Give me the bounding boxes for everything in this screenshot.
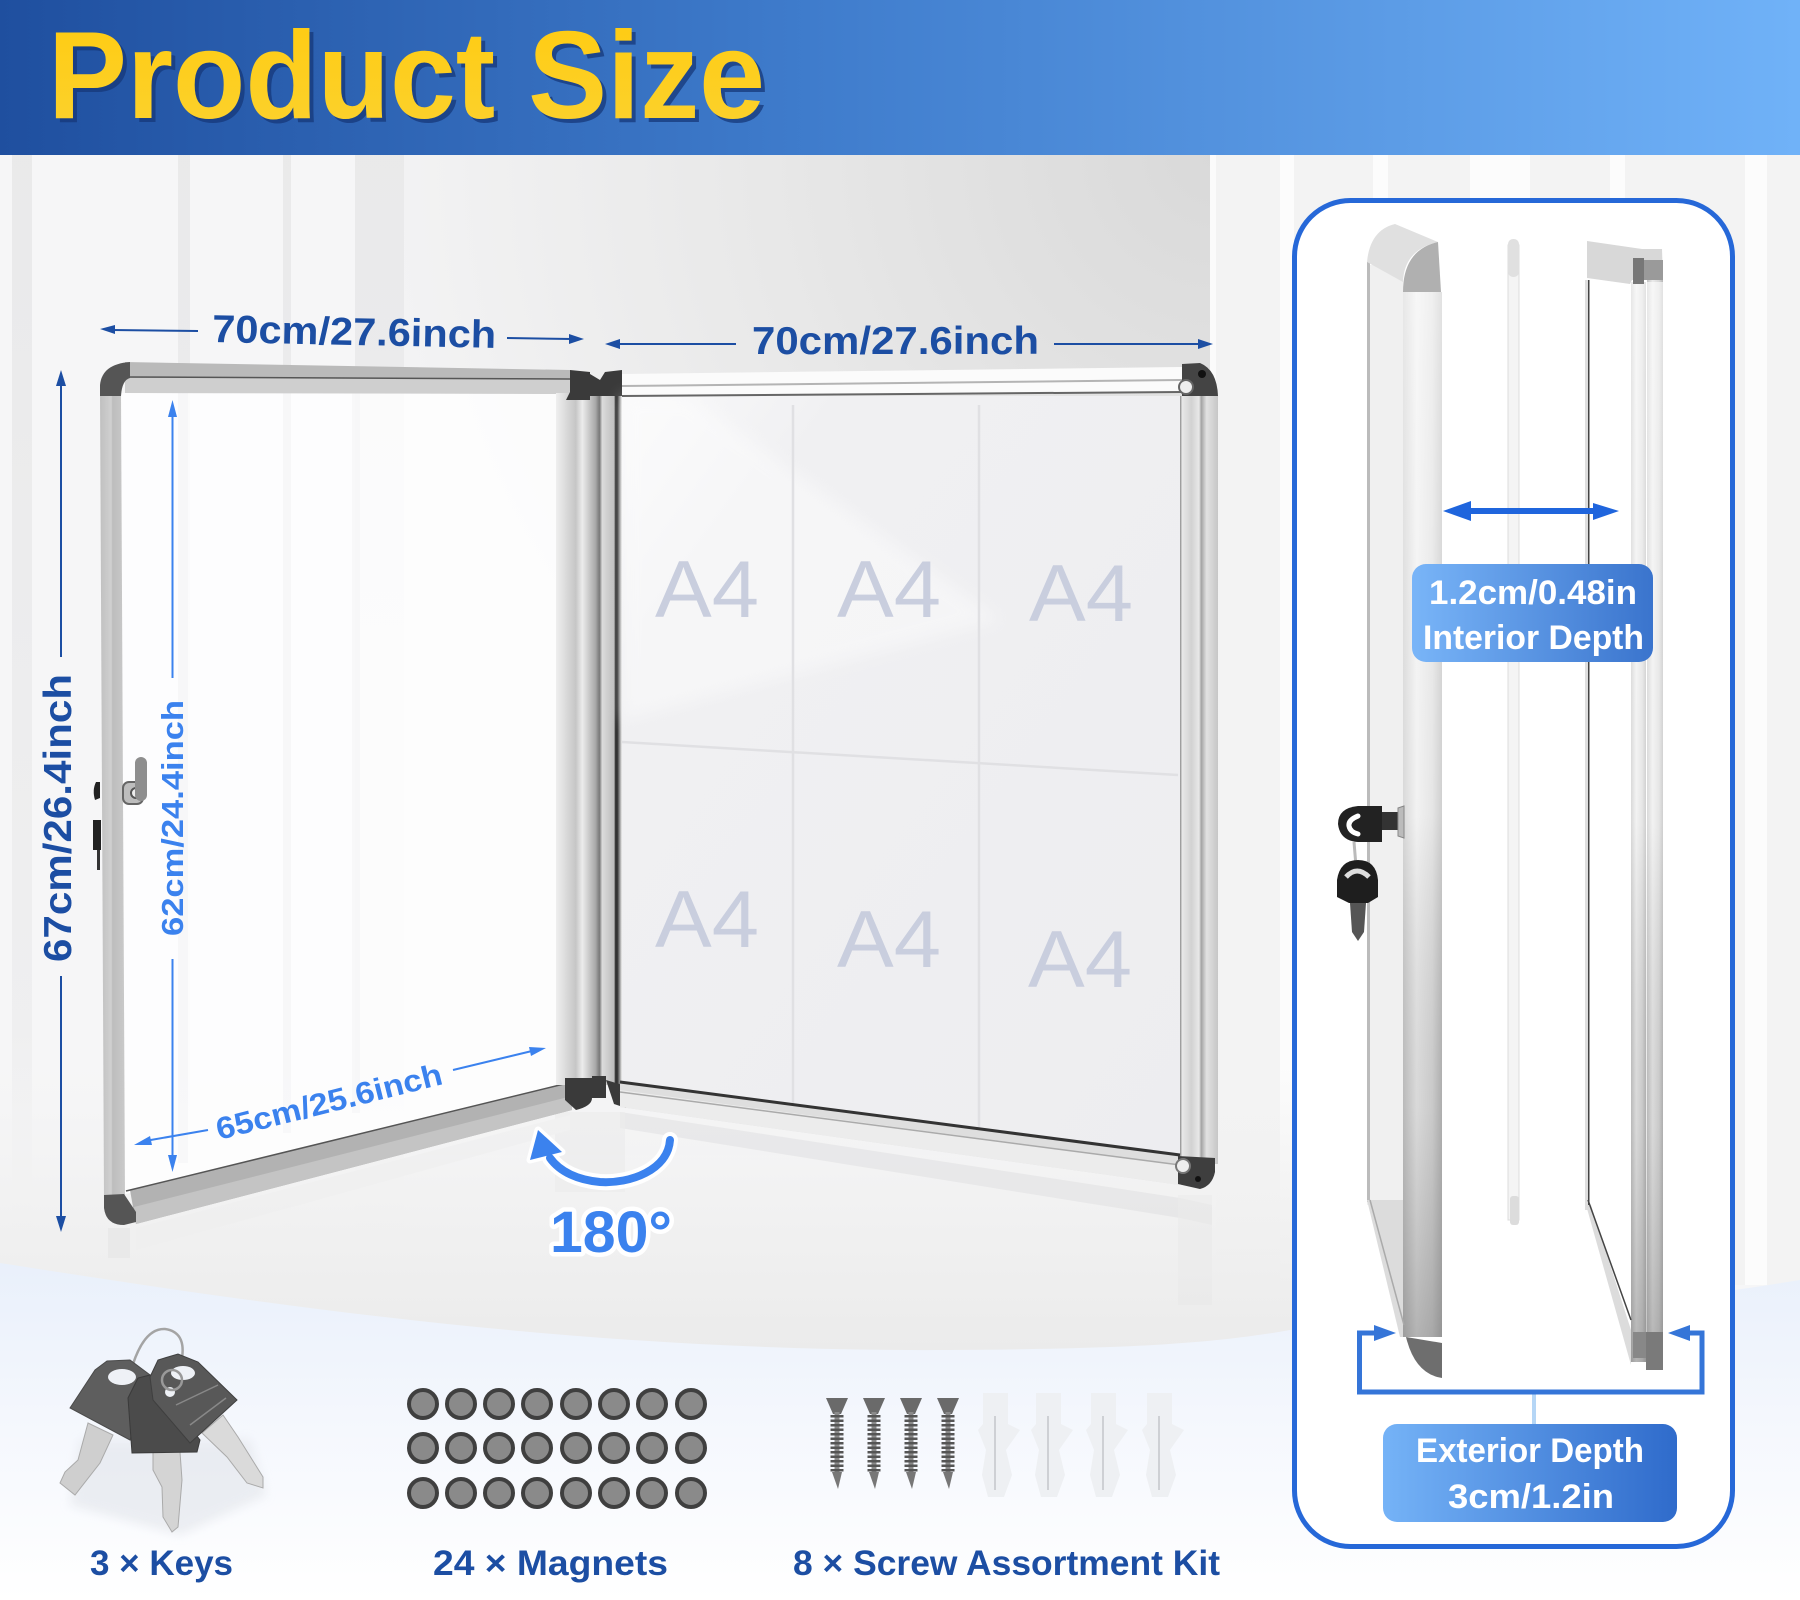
- A4 labels: A4: [837, 545, 941, 635]
- dimension: interior width 65cm/25.6inch: 65cm/25.6inch: [212, 1057, 446, 1147]
- title: Product Size: Product Size: [48, 7, 765, 145]
- left door: frame: [100, 362, 572, 1224]
- right profile: [1585, 241, 1663, 1370]
- centre glass rod: [1508, 239, 1519, 1225]
- A4 labels: A4: [837, 895, 941, 985]
- A4 labels: A4: [655, 545, 759, 635]
- badge: interior depth: Interior Depth: [1423, 619, 1644, 657]
- lock and key: [1337, 806, 1404, 941]
- label: 3 × Keys: 3 × Keys: [90, 1544, 233, 1583]
- badge: exterior depth: Exterior Depth: [1416, 1432, 1644, 1470]
- left profile: [1367, 224, 1442, 1378]
- right door: glass pane with A4 sheets: [622, 396, 1180, 1156]
- title: Product Size: Product Size: [52, 11, 769, 149]
- dimension: interior height 62cm/24.4inch: [155, 400, 190, 1172]
- left door: corner caps: [100, 362, 136, 1225]
- right door: corner caps: [1176, 363, 1218, 1189]
- right door: frame: [620, 367, 1218, 1185]
- icon: 180 degree rotation arrow: [530, 1130, 670, 1182]
- label: 8 × Screw Assortment Kit: 8 × Screw Assortment Kit: [793, 1544, 1220, 1583]
- icon: wall anchors: [978, 1393, 1184, 1497]
- A4 labels: [655, 545, 1133, 1005]
- lock on left door: [93, 757, 147, 870]
- icon: keys: [60, 1329, 266, 1535]
- dimension: top right 70cm/27.6inch: 70cm/27.6inch: [752, 320, 1039, 363]
- dimension: top left 70cm/27.6inch: 70cm/27.6inch: [212, 308, 497, 357]
- dimension: top right 70cm/27.6inch: [605, 320, 1213, 363]
- open display board: [93, 362, 1218, 1225]
- A4 labels: A4: [1028, 915, 1132, 1005]
- label: 24 × Magnets: 24 × Magnets: [433, 1544, 668, 1583]
- dimension: top left 70cm/27.6inch: [100, 308, 584, 357]
- left door: glass pane: [121, 393, 556, 1195]
- dimension: interior width 65cm/25.6inch: [134, 1047, 546, 1147]
- hinge caps: [565, 370, 626, 1110]
- dimension: interior height 62cm/24.4inch: 62cm/24.4inch: [155, 700, 190, 936]
- floor reflection of the board: [108, 1112, 1212, 1305]
- dimension: height 67cm/26.4inch: 67cm/26.4inch: [37, 674, 80, 962]
- panel: depth side view: [1294, 200, 1732, 1546]
- icon: 24 magnets: [409, 1390, 705, 1507]
- A4 labels: A4: [1029, 549, 1133, 639]
- dimension: height 67cm/26.4inch: [37, 370, 80, 1232]
- badge: exterior depth: 3cm/1.2in: [1448, 1478, 1614, 1516]
- bracket: exterior depth: [1360, 1325, 1702, 1424]
- hinge column: [556, 393, 622, 1085]
- arrow: interior depth: [1443, 501, 1619, 521]
- label: 180°: 180°: [550, 1200, 672, 1265]
- A4 labels: A4: [655, 875, 759, 965]
- badge: interior depth: [1412, 564, 1653, 662]
- badge: interior depth: 1.2cm/0.48in: [1429, 574, 1637, 612]
- icon: screws: [826, 1398, 959, 1489]
- header banner: [0, 0, 1800, 155]
- badge: exterior depth: [1383, 1424, 1677, 1522]
